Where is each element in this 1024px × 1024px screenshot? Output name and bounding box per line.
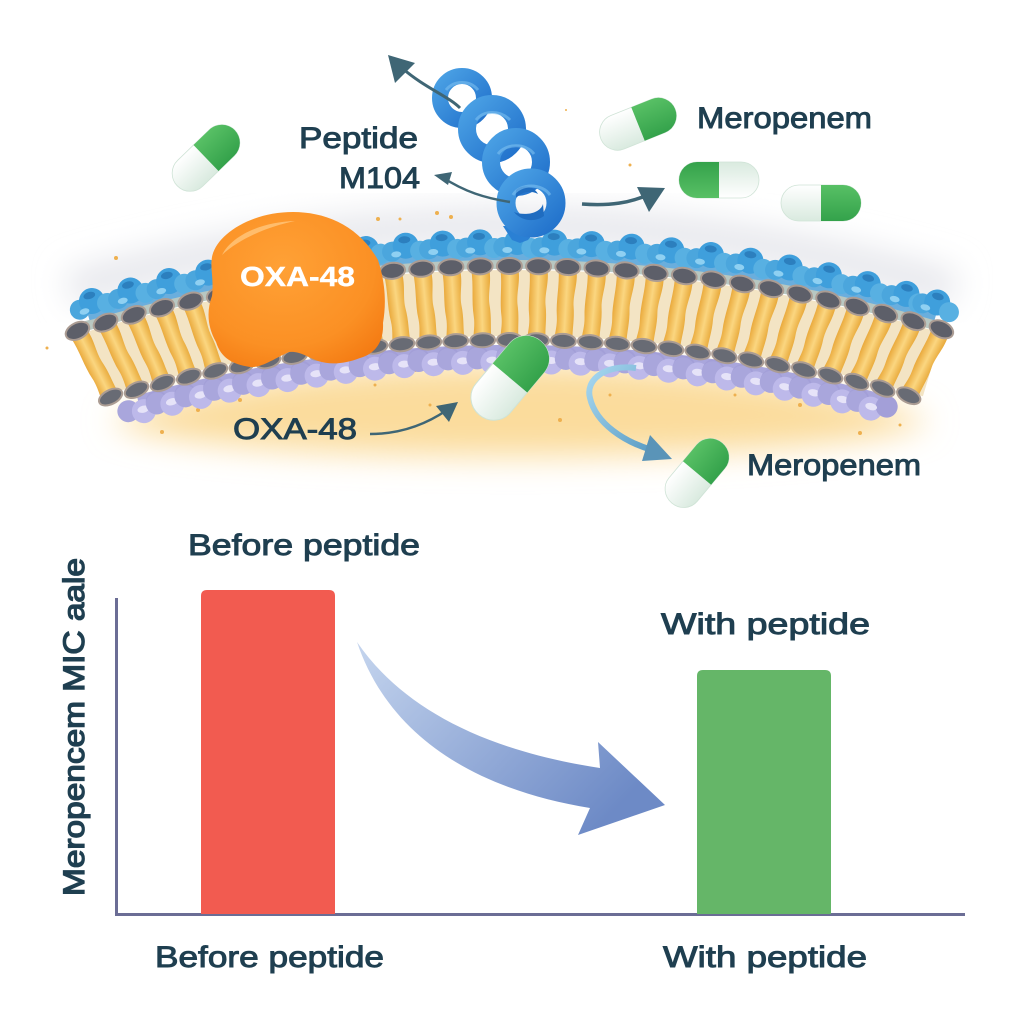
bar title: before peptide: Before peptide xyxy=(188,529,420,562)
membrane bilayer xyxy=(63,229,964,430)
decrease arrow xyxy=(357,642,665,835)
x label: before peptide: Before peptide xyxy=(155,941,384,974)
bar chart xyxy=(58,529,965,974)
axes xyxy=(116,598,965,914)
bar: with peptide xyxy=(697,670,831,914)
label: Peptide M104: Peptide xyxy=(299,122,418,155)
orange speckles xyxy=(46,109,902,435)
pill: horizontal white-green xyxy=(781,185,861,221)
upper shadow band xyxy=(86,264,938,326)
arrow: helix up-left xyxy=(388,55,460,108)
label: Meropenem lower: Meropenem xyxy=(747,449,921,482)
pill: crossing membrane xyxy=(462,327,558,429)
x label: with peptide: With peptide xyxy=(663,941,867,974)
enzyme label: OXA-48 xyxy=(240,261,355,292)
arrow: meropenem exit swoop xyxy=(589,367,672,461)
lipid molecules xyxy=(63,258,956,409)
label: OXA-48 lower: OXA-48 xyxy=(233,413,357,446)
y axis label: Meropencem MIC aale xyxy=(58,558,91,896)
pill: lower right xyxy=(658,431,736,515)
grey shadow above membrane xyxy=(70,225,954,290)
label: Peptide M104: M104 xyxy=(339,162,420,195)
yellow cytoplasm glow below membrane xyxy=(110,364,930,456)
pill: upper left xyxy=(165,117,247,199)
enzyme OXA-48 xyxy=(209,212,385,367)
lipid interior band xyxy=(92,303,932,365)
label: Meropenem upper: Meropenem xyxy=(697,102,872,135)
label: Peptide M104 xyxy=(299,122,420,195)
bar title: with peptide: With peptide xyxy=(661,608,870,641)
pill: horizontal green-white xyxy=(679,162,759,198)
arrow: toward M104 label xyxy=(434,172,510,202)
peptide M104 helix xyxy=(440,76,556,243)
arrow: toward meropenem pills xyxy=(582,187,665,212)
bar: before peptide xyxy=(201,590,335,914)
arrow: OXA-48 to pill xyxy=(370,402,458,434)
pill: upper middle xyxy=(594,92,682,156)
lower purple head layer xyxy=(114,345,900,430)
upper blue head layer xyxy=(65,229,964,325)
